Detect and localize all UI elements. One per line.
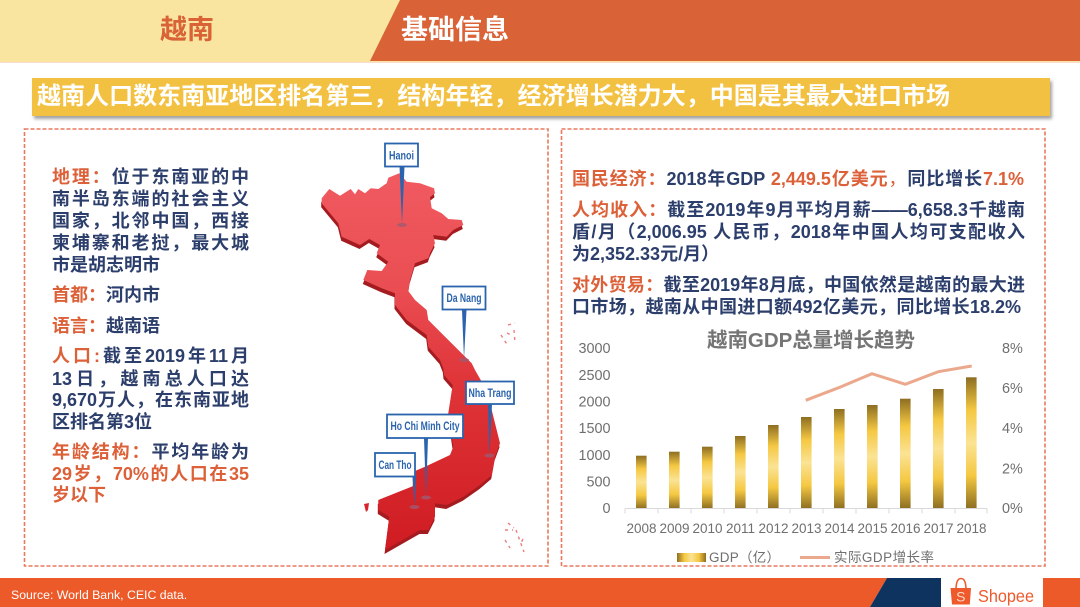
year labels: 2014 <box>824 521 855 536</box>
year labels: 2012 <box>758 521 789 536</box>
right axis labels <box>1002 341 1023 517</box>
footer orange strip <box>0 578 887 607</box>
left axis labels: 2000 <box>578 394 610 410</box>
year labels: 2008 <box>626 521 657 536</box>
text block: population <box>52 346 249 432</box>
left axis labels <box>578 341 610 517</box>
year labels: 2017 <box>923 521 954 536</box>
text block: income per capita: 为2,352.33元/月） <box>572 244 719 264</box>
source note: Source: World Bank, CEIC data. <box>11 588 187 602</box>
pin: Hanoi: Hanoi <box>389 148 414 162</box>
islands <box>501 323 524 552</box>
year labels: 2013 <box>791 521 822 536</box>
year labels: 2018 <box>956 521 987 536</box>
text block: foreign trade: 口市场，越南从中国进口额492亿美元，同比增长18.2% <box>572 297 1021 317</box>
bars: GDP <box>636 377 977 508</box>
text block: language: 语言：越南语 <box>52 316 160 336</box>
heading: country: 越南 <box>160 15 214 45</box>
text block: geography: 地理：位于东南亚的中 <box>52 167 249 187</box>
text block: income per capita <box>572 200 1025 264</box>
left axis labels: 500 <box>586 474 610 490</box>
logo: Shopee: Shopee <box>978 586 1034 606</box>
text block: age structure: 年龄结构：平均年龄为 <box>52 442 249 462</box>
text block: geography: 国家，北邻中国，西接 <box>52 211 249 231</box>
year labels: 2015 <box>857 521 888 536</box>
right axis labels: 8% <box>1002 341 1023 357</box>
year labels: 2010 <box>692 521 723 536</box>
logo: Shopee: S <box>956 588 965 604</box>
pin: Da Nang: Da Nang <box>446 291 482 305</box>
year labels: 2011 <box>726 521 755 536</box>
year labels <box>626 521 987 536</box>
text block: age structure: 岁以下 <box>52 485 106 505</box>
text block: age structure <box>52 442 249 505</box>
footer bar <box>0 578 1080 607</box>
header band <box>0 0 1080 63</box>
footer right block <box>1043 578 1080 607</box>
right axis labels: 0% <box>1002 501 1023 517</box>
axis <box>625 508 987 514</box>
map: extruded shadow <box>321 177 500 554</box>
left axis labels: 1500 <box>578 421 610 437</box>
island: Phu Quoc <box>364 503 369 512</box>
text block: geography: 南半岛东端的社会主义 <box>52 189 249 209</box>
text block: geography <box>52 167 249 275</box>
text block: foreign trade: 对外贸易：截至2019年8月底，中国依然是越南的最大进 <box>572 275 1025 295</box>
legend: 实际GDP增长率 <box>834 549 934 565</box>
map: land <box>322 173 500 550</box>
text block: population: 13日，越南总人口达 <box>52 369 249 389</box>
text block: national economy: 国民经济：2018年GDP 2,449.5亿美元，同比增长7.1% <box>572 169 1024 189</box>
year labels: 2016 <box>890 521 921 536</box>
logo: Shopee <box>950 578 1034 606</box>
legend <box>677 549 934 565</box>
pin: Da Nang <box>442 286 486 362</box>
right axis labels: 6% <box>1002 381 1023 397</box>
right axis labels: 2% <box>1002 462 1023 478</box>
footer navy block <box>870 578 941 607</box>
text block: income per capita: 盾/月（2,006.95 人民币，2018年中国人均可支配收入 <box>572 222 1025 242</box>
left axis labels: 1000 <box>578 448 610 464</box>
left axis labels: 3000 <box>578 341 610 357</box>
panel: left frame <box>24 128 549 567</box>
text block: geography: 市是胡志明市 <box>52 255 160 275</box>
chart title: 越南GDP总量增长趋势 <box>707 329 915 352</box>
line: real GDP growth <box>806 366 972 400</box>
left axis labels: 2500 <box>578 368 610 384</box>
chart: Vietnam GDP growth trend <box>578 329 1023 565</box>
text block: population: 9,670万人，在东南亚地 <box>52 390 249 410</box>
headline banner <box>32 78 1050 116</box>
left axis labels: 0 <box>602 501 610 517</box>
pin: Hanoi <box>385 144 418 227</box>
pin: Can Tho: Can Tho <box>378 458 412 472</box>
pin: Nha Trang <box>466 382 514 458</box>
legend: GDP（亿） <box>709 550 780 565</box>
right axis labels: 4% <box>1002 421 1023 437</box>
text block: foreign trade <box>572 275 1025 317</box>
map of Vietnam with city pins <box>321 142 525 554</box>
text block: geography: 柬埔寨和老挝，最大城 <box>52 233 249 253</box>
year labels: 2009 <box>659 521 690 536</box>
headline banner: 越南人口数东南亚地区排名第三，结构年轻，经济增长潜力大，中国是其最大进口市场 <box>37 83 950 110</box>
text block: capital: 首都：河内市 <box>52 285 160 305</box>
panel: right frame <box>560 128 1046 567</box>
text block: income per capita: 人均收入：截至2019年9月平均月薪——6,658.3千越南 <box>572 200 1025 220</box>
pin: Can Tho <box>375 453 420 509</box>
header orange section <box>370 0 1080 61</box>
text block: population: 人口:截至2019年11月 <box>52 346 249 366</box>
pin: Ho Chi Minh City <box>387 414 463 500</box>
pin: Nha Trang: Nha Trang <box>468 386 512 400</box>
text block: age structure: 29岁，70%的人口在35 <box>52 464 249 484</box>
text block: population: 区排名第3位 <box>52 412 152 432</box>
pin: Ho Chi Minh City: Ho Chi Minh City <box>390 419 460 433</box>
heading: section: 基础信息 <box>401 15 509 45</box>
